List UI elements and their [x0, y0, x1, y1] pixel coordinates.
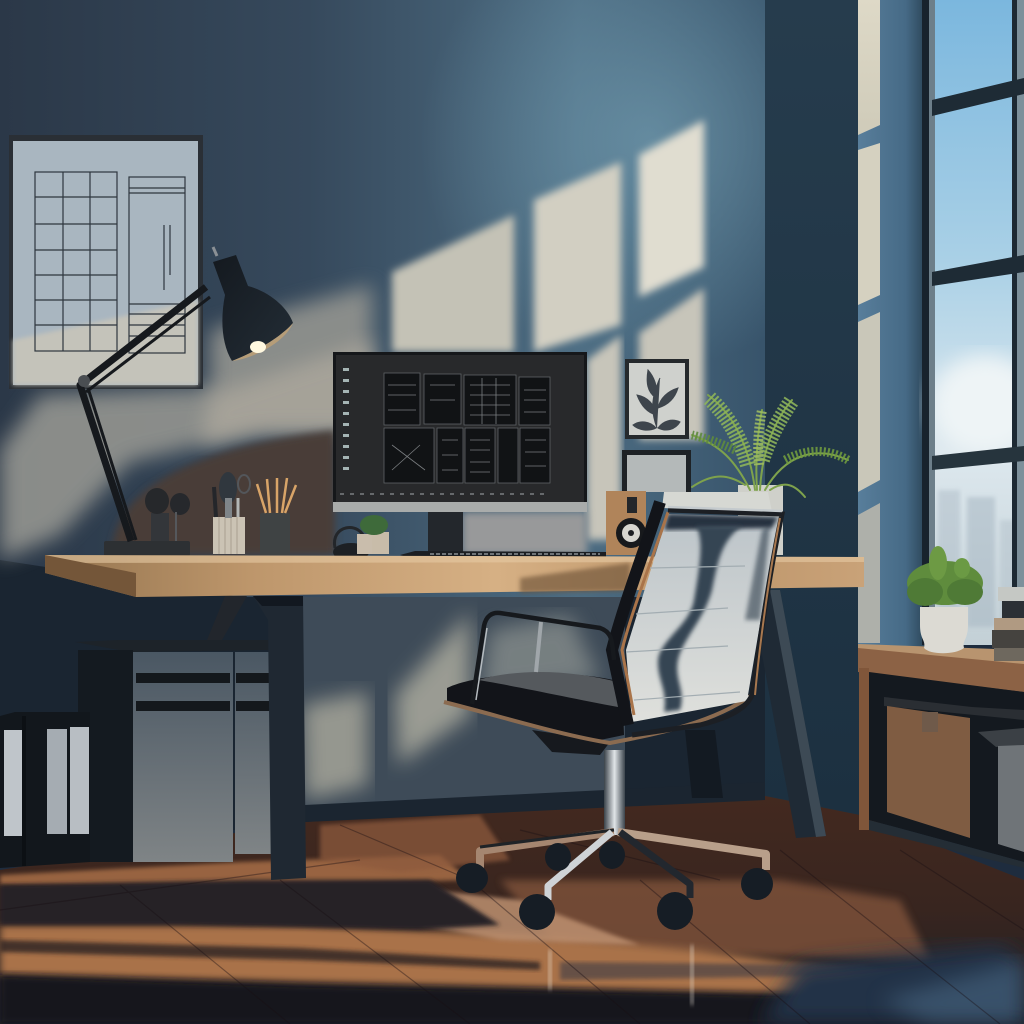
chair base and casters — [456, 750, 773, 930]
chair seat — [444, 672, 752, 755]
right shelf with plant and books — [858, 546, 1024, 868]
monitor — [333, 352, 587, 554]
window — [922, 0, 1024, 645]
keyboard — [400, 551, 606, 561]
floor — [0, 782, 1024, 1024]
headphones, small plant and mouse — [333, 515, 389, 561]
chair armrest — [472, 613, 614, 704]
chair backrest — [612, 492, 782, 735]
wall art: framed blueprint — [9, 135, 203, 389]
desk front leg — [253, 596, 306, 880]
sunlight patches on wall — [0, 120, 704, 800]
office chair — [444, 492, 782, 930]
desk speaker — [606, 491, 646, 555]
desk organiser items — [145, 472, 296, 555]
right side wall and window wall — [765, 0, 926, 820]
potted palm plant — [692, 395, 848, 555]
desk — [45, 555, 864, 838]
back wall — [0, 0, 770, 830]
wall art: small leaf frame — [622, 359, 691, 492]
binders — [0, 712, 90, 868]
filing cabinet — [75, 640, 272, 862]
desk lamp — [78, 247, 293, 556]
